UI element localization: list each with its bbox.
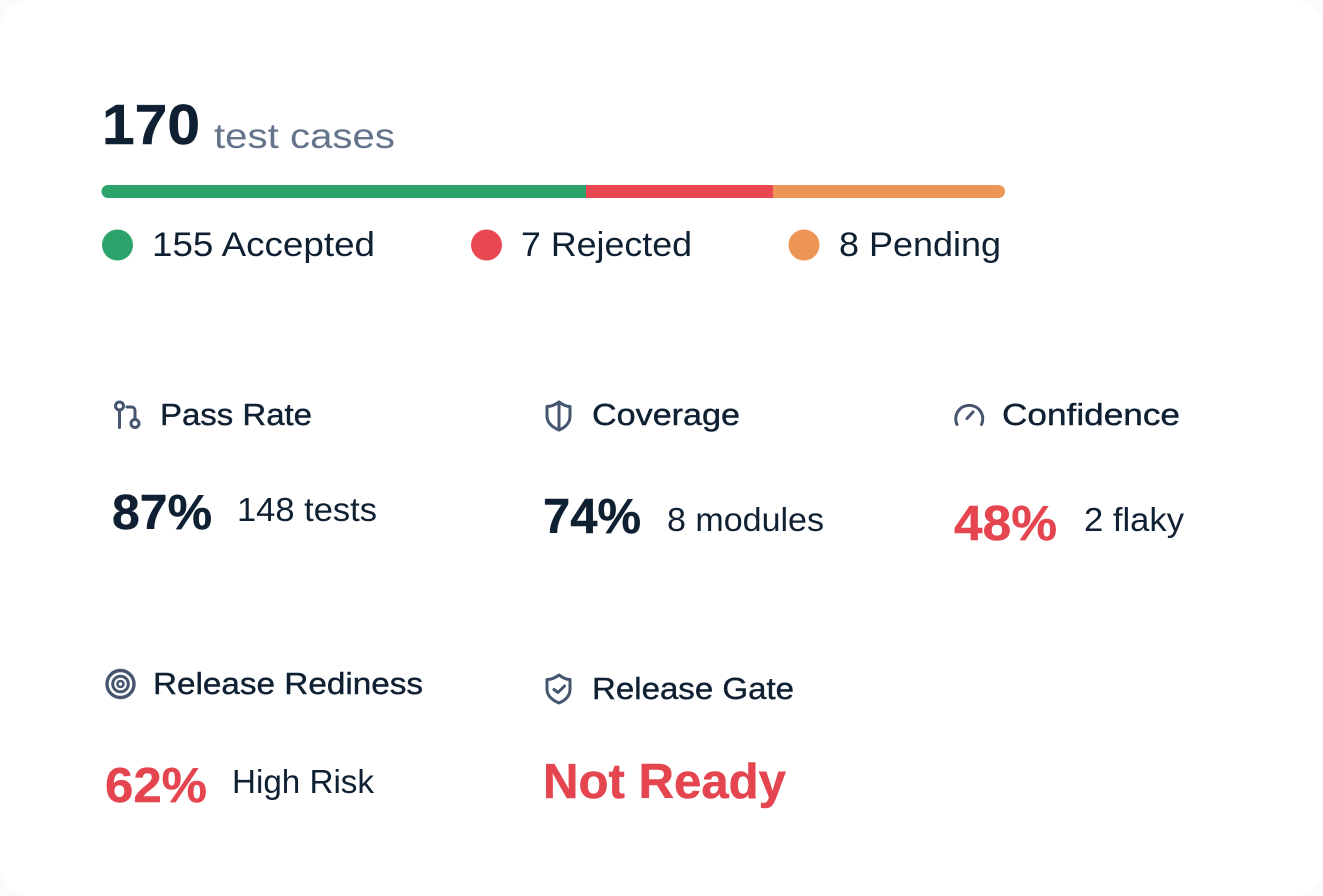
icon: shield [547, 402, 570, 430]
metric: release readiness [105, 666, 423, 813]
headline: test case total: 170 [102, 93, 200, 157]
heading: coverage: Coverage [592, 397, 740, 432]
headline: test case total [102, 93, 395, 157]
legend: rejected: 7 Rejected [521, 226, 692, 264]
heading: pass rate: Pass Rate [160, 397, 312, 432]
legend: accepted: 155 Accepted [152, 226, 375, 264]
icon: shield check [547, 675, 570, 703]
metric: release gate [543, 671, 794, 809]
icon: target [107, 670, 134, 698]
value: not ready: Not Ready [543, 755, 786, 809]
heading: confidence: Confidence [1002, 397, 1180, 432]
value: 48%: 48% [954, 497, 1057, 551]
icon: gauge [956, 405, 983, 424]
heading: release rediness: Release Rediness [153, 666, 423, 701]
icon: git branch [116, 402, 139, 428]
detail: 148 tests: 148 tests [237, 491, 377, 528]
headline: test case total: test cases [214, 117, 395, 156]
detail: 2 flaky: 2 flaky [1084, 501, 1185, 538]
legend: pending: 8 Pending [839, 226, 1001, 264]
metric: coverage [543, 397, 824, 544]
value: 87%: 87% [112, 486, 212, 540]
heading: release gate: Release Gate [592, 671, 794, 706]
value: 62%: 62% [105, 759, 207, 813]
metric: confidence [954, 397, 1185, 551]
stacked progress bar [102, 185, 1005, 198]
detail: 8 modules: 8 modules [667, 501, 824, 538]
detail: high risk: High Risk [232, 763, 375, 800]
metric: pass rate [112, 397, 377, 540]
value: 74%: 74% [543, 490, 641, 544]
